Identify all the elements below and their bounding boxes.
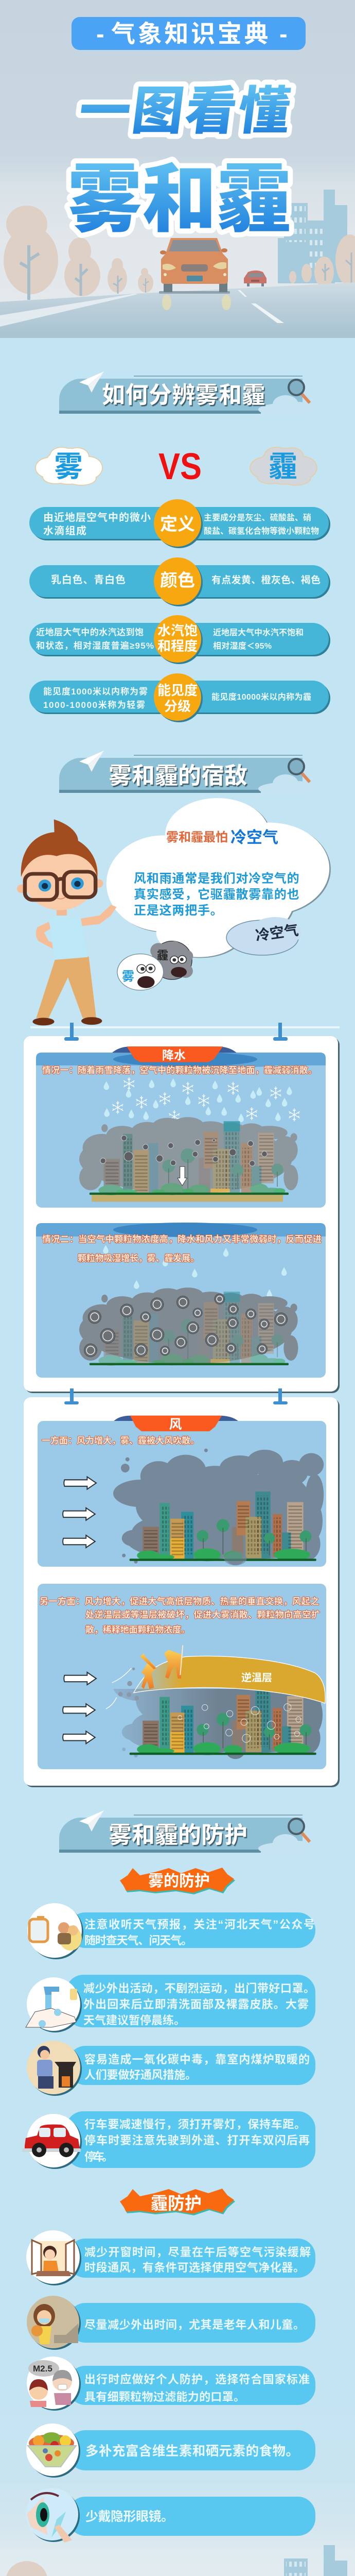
comparison row: saturation: 和状态，相对湿度普遍≥95% bbox=[36, 640, 154, 651]
comparison row: colour: 乳白色、青白色 bbox=[51, 574, 126, 586]
comparison row: visibility: 能见度1000米以内称为雾 bbox=[43, 687, 148, 697]
panel: wind bbox=[24, 1388, 340, 1787]
section heading: protection bbox=[59, 1810, 312, 1855]
section heading: how to tell bbox=[59, 371, 312, 416]
comparison row: visibility bbox=[29, 673, 330, 722]
hero banner bbox=[0, 0, 355, 338]
comparison row: visibility: 能见度10000米以内称为霾 bbox=[211, 692, 311, 702]
item: weather forecast bbox=[27, 1903, 315, 1959]
VS label: VS bbox=[158, 446, 202, 487]
text: other hand: 散，稀释地面颗粒物浓度。 bbox=[85, 1624, 190, 1635]
icon: hand washing bbox=[26, 1987, 77, 2027]
comparison row: visibility: 分级 bbox=[164, 699, 191, 714]
icon: fog cloud bbox=[36, 448, 102, 485]
icon: scared haze and fog clouds: 雾 bbox=[122, 970, 134, 984]
title line 1: 一图看懂 bbox=[76, 82, 295, 140]
comparison row: definition: 由近地层空气中的微小 bbox=[43, 512, 151, 523]
item: wear mask bbox=[27, 2357, 315, 2411]
item: reduce outdoor activity: 天气建议暂停晨练。 bbox=[83, 2014, 185, 2027]
section heading: natural enemy: 雾和霾的宿敌 bbox=[109, 762, 247, 789]
icon: girl at window bbox=[32, 2240, 74, 2276]
figure: workers with tools bbox=[140, 1645, 183, 1689]
item: contact lenses: 少戴隐形眼镜。 bbox=[85, 2510, 174, 2524]
subtitle pill: - bbox=[96, 20, 104, 47]
icon: scared haze and fog clouds bbox=[117, 941, 193, 990]
icon: red car bbox=[22, 2125, 81, 2157]
icon: PM2.5 and masked family bbox=[28, 2360, 72, 2407]
item: ventilation: 时段通风，有条件可选择使用空气净化器。 bbox=[84, 2261, 305, 2274]
comparison row: saturation: 水汽饱 bbox=[157, 623, 198, 638]
text: one hand: 一方面：风力增大，雾、霾被大风吹散。 bbox=[42, 1435, 199, 1446]
speech cloud: 风和雨通常是我们对冷空气的 bbox=[134, 872, 299, 886]
comparison row: definition: 酸盐、碳氢化合物等微小颗粒物 bbox=[204, 526, 319, 536]
VS comparison heading bbox=[36, 446, 316, 487]
item: wear mask: 具有细颗粒物过滤能力的口罩。 bbox=[84, 2391, 245, 2403]
icon: cold air cloud: 冷空气 bbox=[255, 922, 299, 944]
scene: wind breaks inversion layer bbox=[38, 1584, 326, 1769]
text: case two bbox=[42, 1234, 322, 1263]
badge: fog protection: 雾的防护 bbox=[148, 1873, 210, 1890]
character: boy with glasses bbox=[17, 819, 117, 1025]
item: ventilation: 减少开窗时间，尽量在午后等空气污染缓解 bbox=[84, 2246, 311, 2259]
icon: fruit bowl bbox=[28, 2432, 76, 2467]
subtitle pill: - bbox=[279, 20, 288, 47]
badge: haze protection: 霾防护 bbox=[151, 2194, 202, 2213]
text: other hand: 另一方面：风力增大，促进大气高低层物质、热量的垂直交换，风起之 bbox=[40, 1596, 319, 1606]
item: reduce outdoor activity: 外出回来后立即清洗面部及裸露皮肤。大雾 bbox=[83, 1998, 309, 2011]
text: other hand: 处逆温层或等温层被破坏，促进大雾消散、颗粒物向高空扩 bbox=[85, 1609, 320, 1620]
badge: fog protection bbox=[120, 1868, 235, 1894]
item: ventilation bbox=[26, 2230, 315, 2285]
section heading: protection: 雾和霾的防护 bbox=[109, 1822, 247, 1848]
comparison row: definition: 定义 bbox=[160, 515, 195, 534]
speech cloud bbox=[106, 798, 331, 958]
icon: haze cloud bbox=[251, 448, 316, 485]
item: reduce outdoor activity: 减少外出活动，不剧烈运动，出门带好口罩。 bbox=[83, 1982, 315, 1995]
panel: precipitation bbox=[24, 1030, 340, 1393]
icon: cold air cloud bbox=[226, 917, 301, 955]
item: slow driving: 停车时要注意先驶到外道、打开车双闪后再 bbox=[84, 2134, 310, 2147]
title line 2: 雾和霾 bbox=[67, 158, 291, 241]
subtitle pill bbox=[72, 17, 306, 50]
text: case one: 情况一：随着雨雪降落，空气中的颗粒物被沉降至地面，霾减弱消散。 bbox=[42, 1065, 317, 1075]
icon: eye with lens bbox=[27, 2493, 72, 2543]
icon: man by stove bbox=[37, 2046, 76, 2089]
text: case two: 情况二：当空气中颗粒物浓度高，降水和风力又非常微弱时，反而促进 bbox=[42, 1234, 322, 1244]
label: inversion layer: 逆温层 bbox=[241, 1671, 272, 1684]
icon: haze cloud: 霾 bbox=[269, 450, 297, 483]
item: vitamin food: 多补充富含维生素和硒元素的食物。 bbox=[85, 2444, 299, 2459]
icon: tv and family bbox=[29, 1916, 82, 1951]
comparison row: saturation: 近地层大气中的水汽达到饱 bbox=[36, 628, 144, 637]
comparison row: visibility: 能见度 bbox=[157, 683, 198, 698]
item: slow driving: 停车。 bbox=[84, 2150, 113, 2163]
comparison row: saturation bbox=[29, 615, 330, 664]
item: reduce outdoor activity bbox=[26, 1975, 315, 2032]
comparison row: colour: 有点发黄、橙灰色、褐色 bbox=[211, 574, 321, 586]
comparison row: definition: 主要成分是灰尘、硫酸盐、硝 bbox=[204, 513, 311, 522]
comparison row: definition bbox=[29, 499, 330, 548]
scene: case one bbox=[36, 1046, 326, 1208]
comparison row: definition: 水滴组成 bbox=[43, 524, 86, 537]
item: vitamin food bbox=[26, 2424, 315, 2478]
item: coal stove: 容易造成一氧化碳中毒，靠室内煤炉取暖的 bbox=[84, 2053, 310, 2066]
icon: mother and child with masks bbox=[31, 2304, 78, 2344]
hanger bar top bbox=[30, 1023, 340, 1041]
text: case two: 颗粒物吸湿增长，雾、霾发展。 bbox=[78, 1253, 199, 1263]
item: stay indoors bbox=[27, 2296, 315, 2350]
speech cloud: 真实感受，它驱霾散雾靠的也 bbox=[134, 887, 299, 902]
text: other hand bbox=[40, 1596, 320, 1635]
item: weather forecast: 注意收听天气预报，关注“河北天气”公众号 bbox=[84, 1918, 315, 1931]
item: wear mask: 出行时应做好个人防护，选择符合国家标准 bbox=[84, 2373, 310, 2386]
footer scene bbox=[0, 2355, 355, 2576]
section heading: how to tell: 如何分辨雾和霾 bbox=[102, 382, 265, 408]
speech cloud: 雾和霾最怕 bbox=[166, 831, 228, 844]
comparison row: saturation: 和程度 bbox=[157, 638, 198, 654]
comparison row: visibility: 1000-10000米称为轻雾 bbox=[43, 700, 145, 710]
comparison row: colour bbox=[29, 557, 330, 606]
comparison row: saturation: 相对湿度＜95% bbox=[213, 641, 272, 651]
item: coal stove: 人们要做好通风措施。 bbox=[84, 2069, 197, 2081]
icon: PM2.5 and masked family: M2.5 bbox=[33, 2364, 52, 2374]
subtitle pill: 气象知识宝典 bbox=[111, 20, 271, 47]
icon: fog cloud: 雾 bbox=[54, 450, 83, 483]
tab label: precipitation: 降水 bbox=[162, 1048, 186, 1062]
item: weather forecast: 随时查天气、问天气。 bbox=[84, 1934, 192, 1947]
tab label: wind: 风 bbox=[169, 1417, 182, 1432]
badge: haze protection bbox=[120, 2189, 235, 2215]
speech cloud: 冷空气 bbox=[230, 828, 278, 846]
item: contact lenses bbox=[26, 2488, 315, 2543]
item: coal stove bbox=[27, 2041, 315, 2096]
comparison row: saturation: 近地层大气中水汽不饱和 bbox=[213, 628, 304, 637]
section heading: natural enemy bbox=[59, 751, 312, 795]
item: slow driving bbox=[22, 2111, 315, 2169]
speech cloud: 正是这两把手。 bbox=[134, 904, 223, 918]
icon: scared haze and fog clouds: 霾 bbox=[157, 949, 168, 962]
scene: case two bbox=[36, 1223, 326, 1378]
comparison row: colour: 颜色 bbox=[160, 571, 195, 590]
item: slow driving: 行车要减速慢行，须打开雾灯，保持车距。 bbox=[84, 2118, 306, 2131]
item: stay indoors: 尽量减少外出时间，尤其是老年人和儿童。 bbox=[84, 2318, 305, 2331]
scene: wind disperses bbox=[38, 1416, 326, 1567]
